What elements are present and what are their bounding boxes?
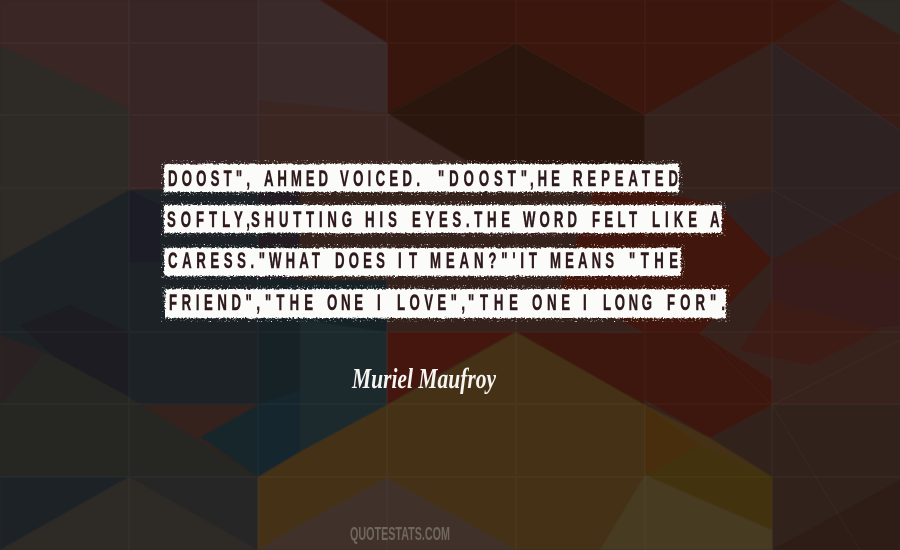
quote line 3: "THE [629,249,678,273]
speckled strip edges [161,160,730,322]
quote line 2 [167,208,720,232]
quote line 2: EYES.THE [412,208,510,232]
quote line 3: MEANS [550,249,614,273]
quote line 4: FRIEND", [169,291,260,315]
quote line 1: DOOST", [168,167,250,191]
white strip backgrounds [164,164,726,318]
quote line 1: "DOOST" [438,167,527,191]
quote line 1: VOICED. [340,167,420,191]
quote line 4: "THE [265,291,313,315]
quote line 4: "THE [468,291,518,315]
quote line 4: ONE [327,291,363,315]
quote line 2: HIS [365,208,397,232]
quote text strips [161,160,730,322]
quote line 4: I [377,291,381,315]
quote line 4: ONE [532,291,570,315]
quote line 1 [168,167,678,191]
quote line 4: LONG [603,291,652,315]
quote line 3 [168,249,678,273]
quote line 1: AHMED [264,167,328,191]
quote line 4: FOR". [667,291,725,315]
quote line 4: I [583,291,587,315]
quote line 2: LIKE [652,208,697,232]
quote line 2: FELT [592,208,637,232]
quote line 3: CARESS." [168,249,265,273]
quote line 1: ,HE [530,167,560,191]
watermark: QUOTESTATS.COM [350,524,450,544]
quote line 3: DOES [335,249,385,273]
quote line 3: MEAN?"'IT [430,249,537,273]
quote line 2: SHUTTING [251,208,352,232]
quote line 4: LOVE", [397,291,465,315]
quote line 2: SOFTLY, [167,208,250,232]
quote line 2: A [710,208,720,232]
quote line 3: IT [398,249,417,273]
author signature: Muriel Maufroy [351,364,496,395]
quote line 4 [169,291,725,315]
quote line 2: WORD [523,208,577,232]
quote line 1: REPEATED [573,167,678,191]
quote line 3: WHAT [269,249,320,273]
